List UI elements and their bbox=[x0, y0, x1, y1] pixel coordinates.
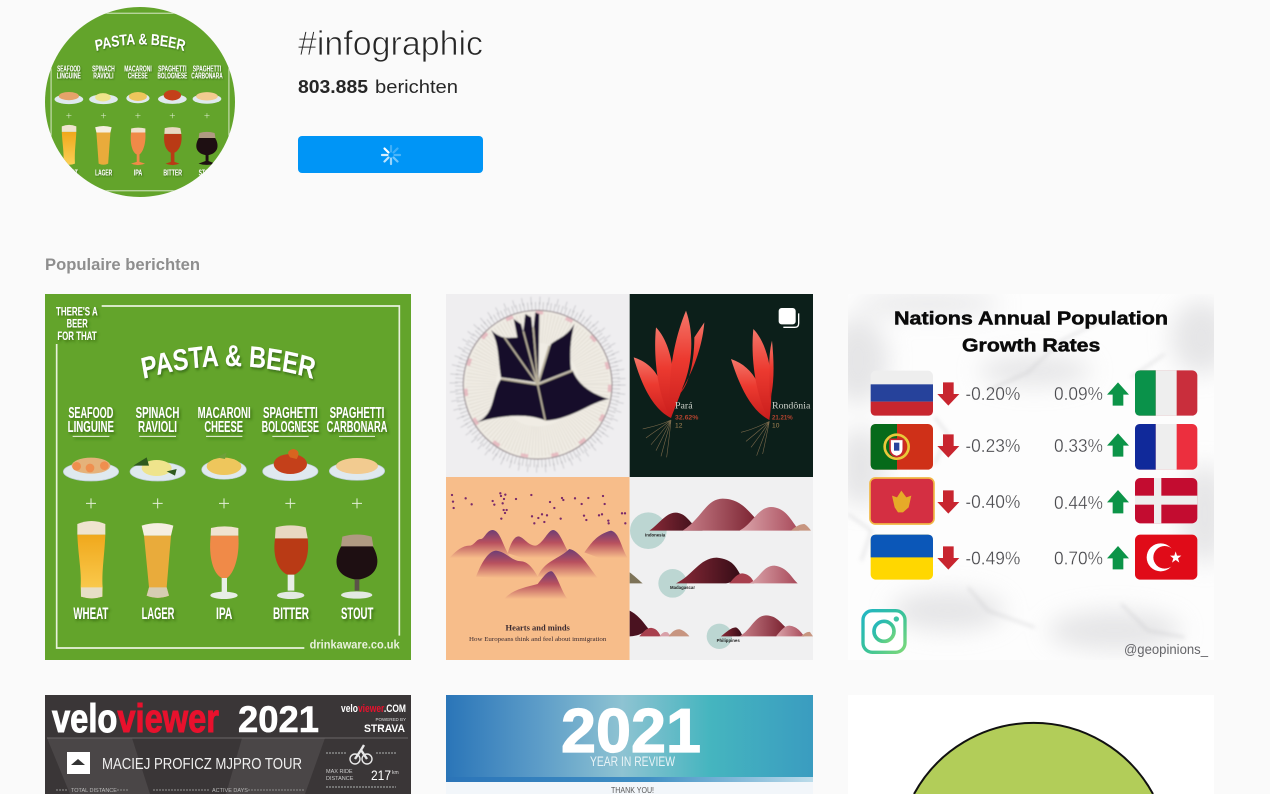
arrow down bbox=[937, 434, 959, 458]
flower labels: Rondônia bbox=[772, 400, 811, 411]
caption bbox=[469, 623, 607, 643]
hashtag avatar: RAVIOLI bbox=[93, 72, 114, 81]
hashtag avatar: SPINACH bbox=[92, 64, 115, 73]
hashtag title: #infographic bbox=[298, 25, 483, 63]
flower: Rondônia bbox=[731, 329, 774, 456]
beer: bitter bbox=[274, 525, 308, 599]
flag: Denmark bbox=[1135, 478, 1197, 523]
pasta names bbox=[68, 405, 387, 436]
panel: red flowers bbox=[630, 294, 813, 477]
beer names: STOUT bbox=[341, 604, 373, 623]
hashtag avatar: SPAGHETTI bbox=[158, 64, 187, 73]
tagline: FOR THAT bbox=[57, 329, 97, 343]
pasta names: RAVIOLI bbox=[138, 419, 177, 436]
arrow up bbox=[1107, 490, 1129, 513]
tagline bbox=[56, 304, 98, 343]
value: 0.70% bbox=[1054, 548, 1103, 568]
pasta names: SEAFOOD bbox=[68, 405, 113, 422]
value: -0.23% bbox=[965, 436, 1020, 456]
post: veloviewer 2021 bbox=[45, 695, 411, 794]
stat headers: TOTAL DISTANCE bbox=[71, 788, 117, 794]
arrow up bbox=[1107, 546, 1129, 569]
post: data visualisation collage bbox=[446, 294, 813, 660]
hashtag avatar: WHEAT bbox=[60, 168, 78, 178]
beer: ipa bbox=[210, 526, 239, 599]
profile badge bbox=[67, 752, 90, 774]
value: 0.33% bbox=[1054, 436, 1103, 456]
arrow up bbox=[1107, 433, 1129, 457]
flag: Portugal bbox=[871, 424, 933, 470]
icon: instagram bbox=[863, 611, 905, 652]
arrow down bbox=[937, 546, 959, 570]
flag: Turkey bbox=[1135, 535, 1197, 580]
chart: Indonesia: Indonesia bbox=[645, 532, 666, 537]
pasta plates bbox=[63, 449, 385, 481]
icon: cyclist bbox=[326, 745, 396, 764]
value: -0.49% bbox=[965, 548, 1020, 568]
tagline: BEER bbox=[67, 317, 88, 331]
flag: Italy bbox=[1135, 370, 1197, 416]
mountains bbox=[449, 530, 628, 599]
max ride distance stat: DISTANCE bbox=[326, 776, 354, 782]
chart: Philippines: Philippines bbox=[717, 638, 740, 643]
flag: Ukraine bbox=[871, 535, 933, 580]
post count bbox=[298, 77, 458, 97]
panel: hill charts bbox=[630, 477, 813, 660]
post: green circle bbox=[913, 722, 1154, 794]
beer: lager bbox=[142, 523, 173, 598]
chart: Madagascar bbox=[630, 558, 798, 598]
pasta names: BOLOGNESE bbox=[262, 419, 319, 436]
year: 2021 bbox=[238, 699, 319, 740]
max ride distance stat: km bbox=[392, 770, 399, 776]
plus signs bbox=[86, 498, 362, 508]
beer names: WHEAT bbox=[73, 604, 108, 623]
beer: wheat bbox=[77, 521, 105, 598]
pasta names: CHEESE bbox=[204, 419, 243, 436]
site logo and strava: veloviewer.COM bbox=[341, 703, 406, 715]
value: 0.44% bbox=[1054, 493, 1103, 513]
chart: Madagascar: Madagascar bbox=[670, 585, 695, 590]
marble background bbox=[828, 294, 1231, 660]
green circle bbox=[914, 723, 1153, 794]
stripe bbox=[446, 777, 813, 782]
handle: @geopinions_ bbox=[1124, 642, 1208, 657]
flower labels: 21.21% bbox=[772, 414, 793, 421]
value: -0.20% bbox=[965, 384, 1020, 404]
chart: Indonesia bbox=[630, 499, 811, 549]
flower labels bbox=[675, 400, 811, 430]
heading bbox=[894, 308, 1168, 356]
post count: berichten bbox=[375, 77, 458, 97]
year: 2021 bbox=[561, 697, 701, 766]
hashtag avatar: BOLOGNESE bbox=[157, 72, 188, 81]
icon: carousel bbox=[779, 308, 799, 327]
post: nations annual population growth rates bbox=[848, 295, 1214, 657]
hashtag avatar: SEAFOOD bbox=[57, 64, 81, 73]
stat headers: ACTIVE DAYS bbox=[212, 788, 248, 794]
flower labels: 32.62% bbox=[675, 414, 698, 421]
max ride distance stat: 217 bbox=[371, 767, 391, 783]
caption: How Europeans think and feel about immigration bbox=[469, 636, 607, 643]
frame bbox=[57, 306, 399, 648]
arrow down bbox=[937, 382, 959, 406]
stat headers bbox=[56, 788, 304, 794]
logo: veloviewer: veloviewer bbox=[52, 697, 219, 741]
flag: Russia bbox=[871, 371, 933, 416]
flag: France bbox=[1135, 424, 1197, 470]
hashtag avatar: IPA bbox=[134, 168, 143, 178]
hashtag avatar: PASTA & BEER bbox=[95, 34, 186, 52]
panel: circular dendrogram bbox=[446, 294, 630, 477]
value: 0.09% bbox=[1054, 384, 1103, 404]
beer names: BITTER bbox=[273, 604, 309, 623]
lower panel bbox=[446, 782, 813, 794]
max ride distance stat: MAX RIDE bbox=[326, 769, 353, 775]
beer names bbox=[73, 604, 373, 623]
scattered dots bbox=[451, 492, 626, 524]
heading: Growth Rates bbox=[962, 335, 1100, 356]
hashtag avatar: LINGUINE bbox=[57, 72, 81, 81]
tagline: THERE'S A bbox=[56, 304, 98, 318]
caption: Hearts and minds bbox=[506, 623, 571, 632]
follow button with loading spinner bbox=[298, 136, 483, 173]
flower labels: 12 bbox=[675, 423, 683, 430]
site logo and strava: STRAVA bbox=[364, 723, 405, 735]
site logo and strava: POWERED BY bbox=[375, 717, 406, 722]
header band bbox=[47, 738, 408, 794]
post: pasta and beer bbox=[45, 294, 411, 660]
site logo and strava bbox=[341, 703, 406, 735]
flower labels: 10 bbox=[772, 423, 780, 430]
pasta names: MACARONI bbox=[198, 405, 251, 422]
post: 2021 year in review bbox=[446, 695, 813, 794]
arrow up bbox=[1107, 382, 1129, 406]
hashtag avatar: STOUT bbox=[199, 168, 216, 178]
beer names: IPA bbox=[216, 604, 232, 623]
flower labels: Pará bbox=[675, 400, 693, 411]
hashtag avatar: CHEESE bbox=[128, 72, 148, 81]
chart: Philippines bbox=[630, 611, 813, 649]
flower: Pará bbox=[634, 311, 704, 457]
hashtag avatar: LAGER bbox=[95, 168, 113, 178]
beer names: LAGER bbox=[142, 604, 174, 623]
hashtag avatar bbox=[45, 7, 235, 197]
hashtag avatar: MACARONI bbox=[124, 64, 152, 73]
beer: stout bbox=[336, 534, 377, 599]
value: -0.40% bbox=[965, 492, 1020, 512]
flag: Montenegro bbox=[870, 478, 934, 524]
max ride distance stat bbox=[326, 767, 399, 787]
post count: 803.885 bbox=[298, 77, 368, 97]
pasta names: SPAGHETTI bbox=[263, 405, 318, 422]
heading: Nations Annual Population bbox=[894, 308, 1168, 329]
panel: hearts and minds bbox=[446, 477, 630, 660]
website credit: drinkaware.co.uk bbox=[310, 639, 400, 652]
pasta names: LINGUINE bbox=[68, 419, 114, 436]
section heading: Populaire berichten bbox=[45, 256, 200, 274]
pasta names: SPINACH bbox=[136, 405, 179, 422]
hashtag avatar: BITTER bbox=[163, 168, 183, 178]
heading: pasta and beer: PASTA & BEER bbox=[141, 345, 318, 382]
subtitle: YEAR IN REVIEW bbox=[590, 753, 676, 769]
rider name: MACIEJ PROFICZ MJPRO TOUR bbox=[102, 756, 302, 773]
arrow down bbox=[937, 490, 959, 514]
